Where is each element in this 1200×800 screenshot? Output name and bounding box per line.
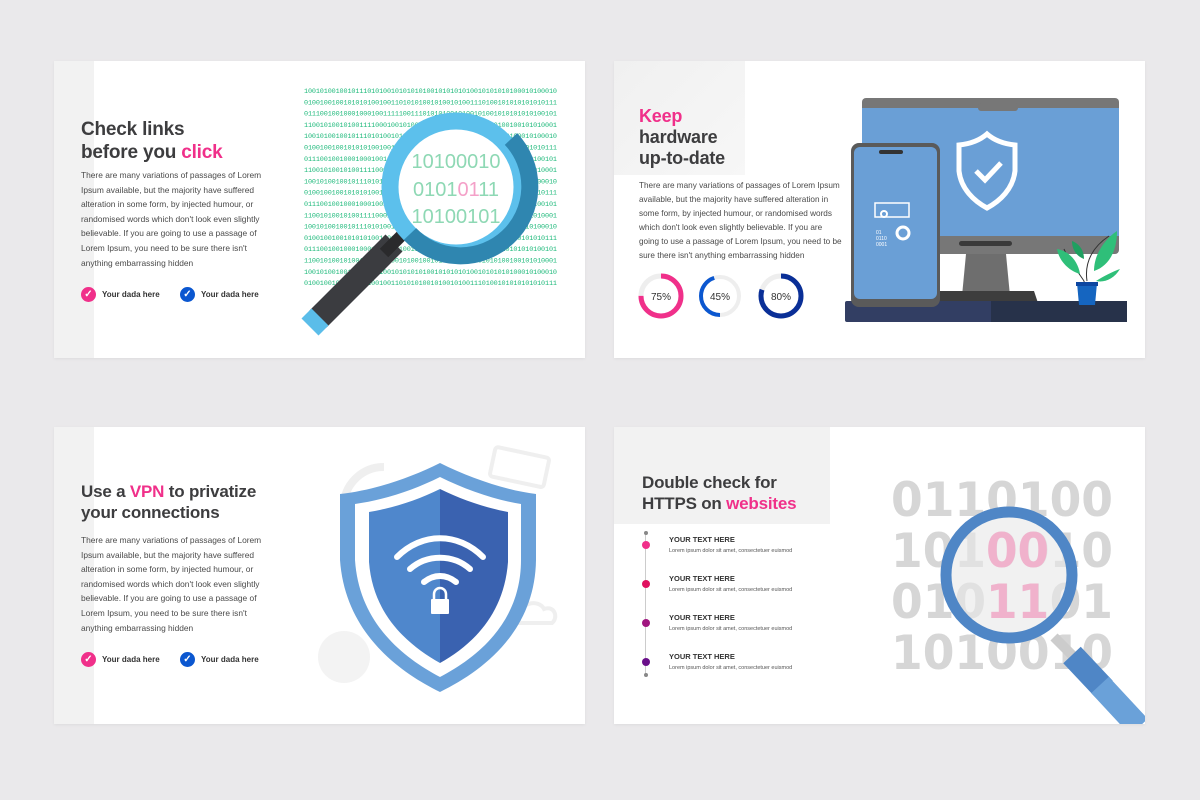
text block (81, 535, 261, 633)
illustration: binary with magnifier: 0110100 (891, 473, 1113, 528)
icon: magnifier: 10100010 (412, 151, 500, 173)
donut 75% (641, 276, 681, 316)
text block: some form, by injected humour, or randomised words (639, 209, 832, 218)
text block: which don't look even slightly believable. If you are (639, 223, 822, 232)
panel: check links (54, 61, 585, 358)
illustration: binary and magnifier: 0100100100101010100100110101010010100101001110100101010101010111 (304, 280, 557, 288)
text block: going to use a passage of Lorem Ipsum, you need to be (639, 237, 842, 246)
check item blue: ✓ (183, 654, 192, 665)
heading: VPN: your connections (81, 503, 220, 522)
timeline item 2: Lorem ipsum dolor sit amet, consectetuer euismod (669, 587, 792, 593)
icon: magnifier (946, 512, 1139, 727)
illustration: binary and magnifier: 0100100100101010100100110101010010100101001110100101010101010111 (304, 235, 557, 243)
donut 45% (701, 277, 739, 315)
timeline item 1 (642, 535, 792, 554)
text block: alteration in some form, by injected humour, or (81, 199, 253, 209)
gray corner box (614, 61, 745, 175)
illustration: binary with magnifier: 1010010 (891, 626, 1113, 681)
text block (81, 170, 261, 268)
check item blue: Your dada here (201, 290, 259, 299)
phone (851, 143, 940, 307)
heading: check links (81, 119, 223, 163)
illustration: monitor phone plant (845, 98, 1127, 322)
illustration: binary and magnifier: 0100100100101010100100110101010010100101001110100101010101010111 (304, 190, 557, 198)
check item pink: ✓ (84, 289, 93, 300)
faded background icons (318, 447, 555, 683)
timeline item 1: Lorem ipsum dolor sit amet, consectetuer euismod (669, 548, 792, 554)
illustration: binary and magnifier: 1100101001010011110001001010010010101010100101010100100101010001 (304, 212, 557, 220)
illustration: binary and magnifier: 1100101001010011110001001010010010101010100101010100100101010001 (304, 258, 557, 266)
plant (1057, 231, 1120, 305)
illustration: binary and magnifier: 0111001001000100010011111001110101010010100101001010101010100101 (304, 246, 557, 254)
text block: sure there isn't anything embarrassing hidden (639, 251, 804, 260)
text block: anything embarrassing hidden (81, 623, 193, 633)
illustration: binary and magnifier: 1100101001010011110001001010010010101010100101010100100101010001 (304, 122, 557, 130)
heading: HTTPS: HTTPS on websites (642, 494, 796, 513)
heading: HTTPS (642, 473, 796, 513)
illustration: binary with magnifier (891, 473, 1145, 724)
timeline item 4: YOUR TEXT HERE (669, 652, 735, 661)
donut charts (638, 274, 804, 318)
illustration: binary and magnifier: 0111001001000100010011111001110101010010100101001010101010100101 (304, 111, 557, 119)
side strip (54, 61, 94, 358)
illustration: binary with magnifier: 00 (986, 524, 1049, 579)
heading: check links: before you click (81, 142, 222, 163)
icon: magnifier (310, 121, 530, 327)
check item blue (180, 652, 259, 667)
timeline (642, 531, 792, 677)
donut 80% (761, 276, 801, 316)
check item pink (81, 287, 160, 302)
heading: keep hardware: up-to-date (639, 148, 725, 168)
illustration: binary and magnifier: 0100100100101010100100110101010010100101001110100101010101010111 (304, 144, 557, 152)
check item pink (81, 652, 160, 667)
heading: keep hardware: Keep (639, 106, 682, 126)
check item pink: ✓ (84, 654, 93, 665)
text block: available, but the majority have suffered alteration in (639, 195, 828, 204)
check item blue (180, 287, 259, 302)
shelf (845, 301, 1127, 322)
phone: 0001 (876, 242, 887, 248)
text block: Lorem Ipsum, you need to be sure there isn't (81, 243, 247, 253)
timeline item 4 (642, 652, 792, 671)
timeline item 2 (642, 574, 792, 593)
illustration: binary with magnifier: 11 (986, 575, 1049, 630)
text block: There are many variations of passages of Lorem (81, 170, 261, 180)
monitor (862, 98, 1119, 303)
gray header box (614, 427, 830, 524)
donut 75%: 75% (651, 292, 671, 303)
donut 80%: 80% (771, 292, 791, 303)
illustration: binary and magnifier: 1001010010010111010100101010101001010101010010101010100010100010 (304, 178, 557, 186)
panel: double check HTTPS (614, 427, 1145, 724)
panel: keep hardware up-to-date (614, 61, 1145, 358)
donut 45%: 45% (710, 292, 730, 303)
illustration: shield with wifi (318, 446, 557, 692)
heading: HTTPS: Double check for (642, 473, 777, 492)
illustration: binary with magnifier: 1010010 (891, 524, 1113, 579)
text block: believable. If you are going to use a passage of (81, 593, 257, 603)
text block: Lorem Ipsum, you need to be sure there isn't (81, 608, 247, 618)
timeline item 3: YOUR TEXT HERE (669, 613, 735, 622)
timeline item 3 (642, 613, 792, 632)
illustration: binary and magnifier: 0111001001000100010011111001110101010010100101001010101010100101 (304, 156, 557, 164)
side strip (54, 427, 94, 724)
illustration: binary and magnifier: 0111001001000100010011111001110101010010100101001010101010100101 (304, 201, 557, 209)
text block: There are many variations of passages of Lorem Ipsum (639, 181, 840, 190)
text block: There are many variations of passages of Lorem (81, 535, 261, 545)
illustration: binary and magnifier: 1100101001010011110001001010010010101010100101010100100101010001 (304, 167, 557, 175)
illustration: binary and magnifier: 1001010010010111010100101010101001010101010010101010100010100010 (304, 269, 557, 277)
timeline item 2: YOUR TEXT HERE (669, 574, 735, 583)
icon: magnifier: 10100101 (412, 206, 500, 228)
check item pink: Your dada here (102, 290, 160, 299)
heading: keep hardware (639, 106, 725, 168)
illustration: binary and magnifier: 0100100100101010100100110101010010100101001110100101010101010111 (304, 99, 557, 107)
illustration: binary and magnifier: 1001010010010111010100101010101001010101010010101010100010100010 (304, 133, 557, 141)
text block: randomised words which don't look even slightly (81, 579, 260, 589)
illustration: binary with magnifier: 0101101 (891, 575, 1113, 630)
illustration: binary and magnifier (302, 88, 557, 336)
illustration: binary and magnifier: 1001010010010111010100101010101001010101010010101010100010100010 (304, 88, 557, 96)
text block (639, 181, 842, 260)
heading: check links: Check links (81, 119, 184, 140)
text block: alteration in some form, by injected humour, or (81, 564, 253, 574)
text block: randomised words which don't look even slightly (81, 214, 260, 224)
phone: 0110 (876, 236, 887, 242)
timeline item 1: YOUR TEXT HERE (669, 535, 735, 544)
phone: 01 (876, 230, 882, 236)
check item blue: Your dada here (201, 655, 259, 664)
timeline item 4: Lorem ipsum dolor sit amet, consectetuer euismod (669, 665, 792, 671)
text block: Ipsum available, but the majority have suffered (81, 550, 254, 560)
check item blue: ✓ (183, 289, 192, 300)
panel: use a VPN (54, 427, 585, 724)
text block: anything embarrassing hidden (81, 258, 193, 268)
timeline item 3: Lorem ipsum dolor sit amet, consectetuer euismod (669, 626, 792, 632)
text block: Ipsum available, but the majority have suffered (81, 185, 254, 195)
illustration: binary and magnifier: 1001010010010111010100101010101001010101010010101010100010100010 (304, 224, 557, 232)
heading: VPN (81, 482, 256, 522)
check item pink: Your dada here (102, 655, 160, 664)
heading: VPN: Use a VPN to privatize (81, 482, 256, 501)
icon: magnifier: 01010111 (413, 179, 499, 201)
heading: keep hardware: hardware (639, 127, 717, 147)
text block: believable. If you are going to use a passage of (81, 228, 257, 238)
